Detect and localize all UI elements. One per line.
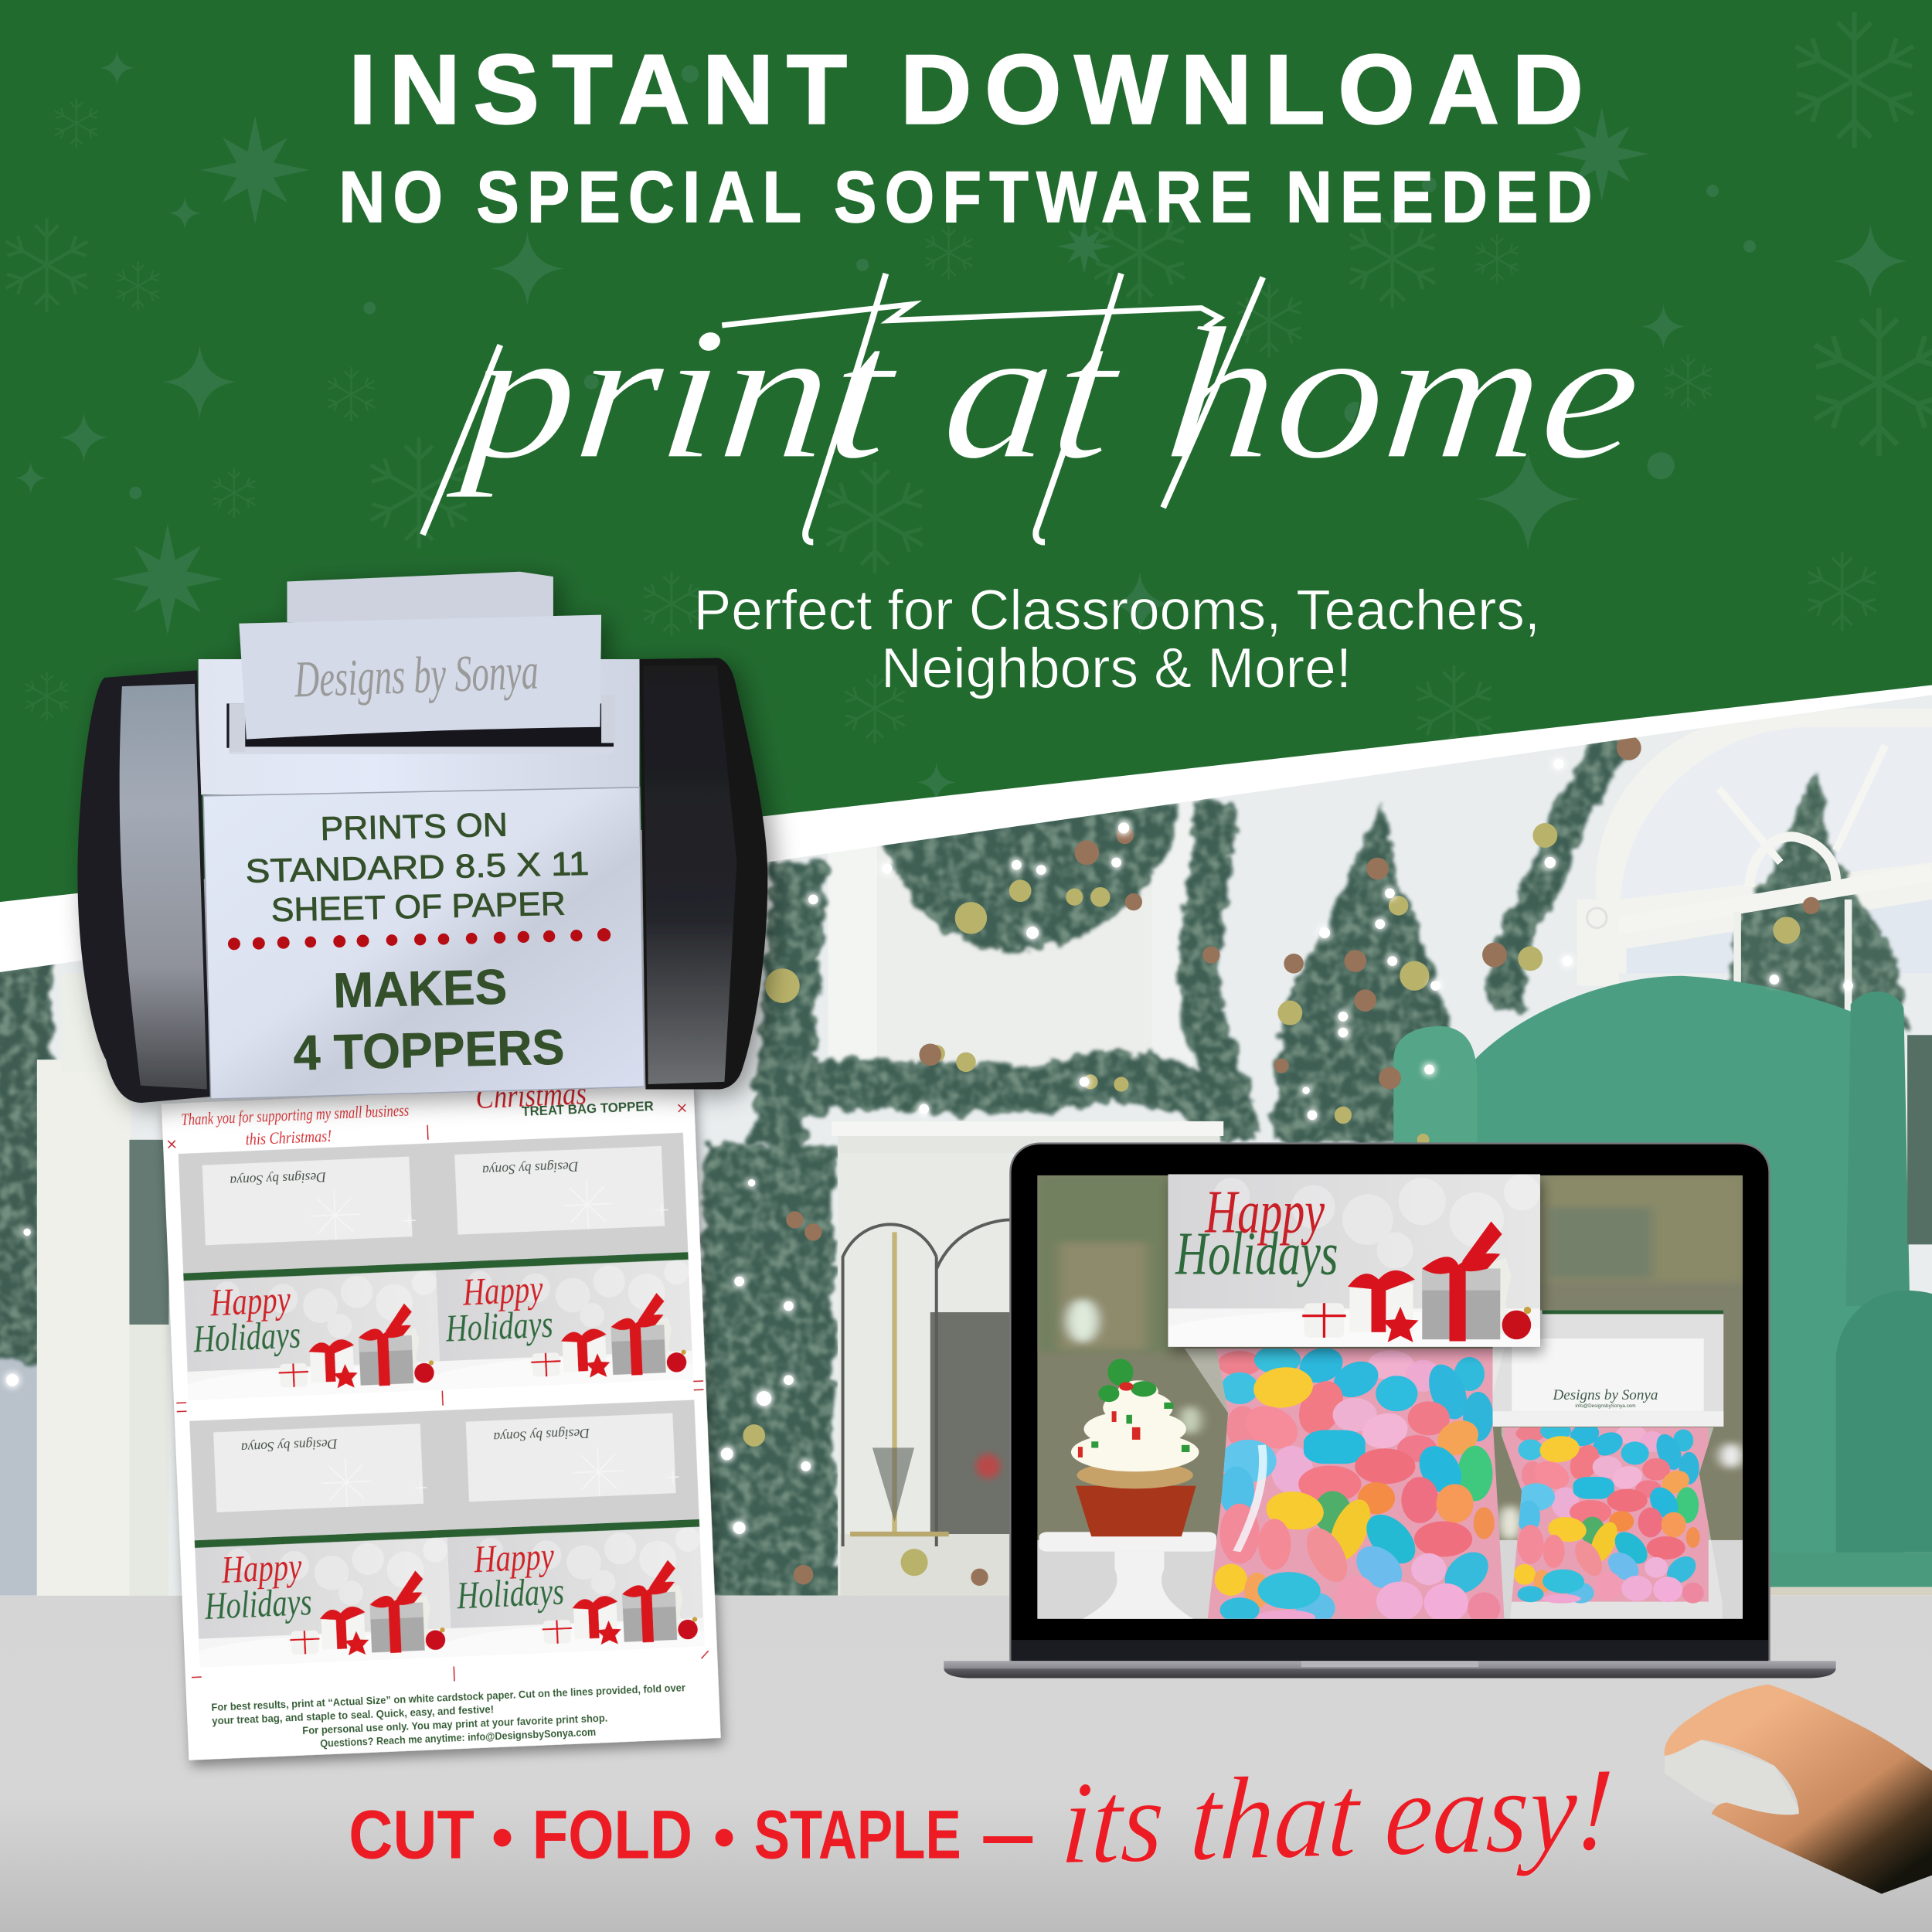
topper front row 1 right (405, 1258, 719, 1418)
sheet header text: Thank you for supporting my small business (181, 1100, 410, 1129)
topper front row 1 right: Happy (461, 1267, 544, 1313)
small card logo: info@DesignsbySonya.com (1575, 1403, 1636, 1409)
small topper card back (1493, 1310, 1723, 1427)
topper front row 1 right: Holidays (444, 1303, 554, 1349)
paper slot (226, 695, 615, 754)
paper coming out with logo (239, 615, 601, 740)
script title: print at home (423, 274, 1650, 543)
small card logo: Designs by Sonya (1552, 1387, 1658, 1403)
fireplace mantel and hearth (832, 1121, 1223, 1596)
printer (77, 572, 767, 1103)
left tree and column (0, 949, 168, 1596)
cut marks (165, 1104, 716, 1692)
printer panel text: MAKES (332, 958, 508, 1019)
subheadline: no special software needed: NO SPECIAL SOFTWARE NEEDED (338, 156, 1592, 237)
printing instructions: your treat bag, and staple to seal. Quick, easy, and festive! (212, 1703, 494, 1727)
snow stars pattern (15, 50, 1907, 802)
table surface floor (0, 1596, 1932, 1932)
topper back row 2 left: Designs by Sonya (240, 1437, 338, 1456)
red dotted divider (228, 928, 611, 950)
topper front row 2 right: Happy (472, 1535, 555, 1580)
cupcake (1071, 1359, 1199, 1536)
green background panel (0, 0, 1932, 986)
printer top housing (199, 659, 639, 794)
small treat bag (1502, 1421, 1723, 1619)
script title: print at home: print at home (444, 289, 1650, 498)
front panel (203, 787, 645, 1099)
sheet header text (180, 1072, 655, 1151)
headline: instant download: INSTANT DOWNLOAD (349, 35, 1583, 145)
green fold strip row 2 (195, 1519, 699, 1549)
laptop notch (1301, 1661, 1478, 1667)
laptop base (944, 1661, 1836, 1679)
armchair (1393, 976, 1932, 1597)
topper front row 2 left: Holidays (203, 1580, 313, 1628)
green fold strip row 1 (183, 1252, 689, 1281)
bottom slogan: cut fold staple: CUT (349, 1795, 474, 1872)
bottom slogan script: its that easy: its that easy! (1058, 1743, 1617, 1889)
big topper card front: Holidays (1175, 1220, 1338, 1288)
printer panel text: STANDARD 8.5 X 11 (245, 845, 590, 890)
sheet header text: this Christmas! (245, 1126, 332, 1148)
topper back row 2 right: Designs by Sonya (493, 1426, 590, 1445)
printed sheet of toppers (145, 1070, 733, 1761)
bottom slogan: cut fold staple: STAPLE (754, 1795, 961, 1872)
bottom slogan: cut fold staple: — (983, 1795, 1033, 1872)
ornaments (721, 736, 1853, 1586)
printing instructions: For personal use only. You may print at your favorite print shop. (302, 1713, 608, 1736)
topper back row 2 right (442, 1400, 699, 1530)
bottom slogan: cut fold staple: FOLD (532, 1795, 692, 1872)
bottom slogan: cut fold staple: • (713, 1802, 735, 1871)
tagline: Neighbors & More! (881, 637, 1352, 700)
computer mouse (1665, 1740, 1801, 1821)
topper back row 1 left (179, 1143, 436, 1274)
big topper card front: Happy (1205, 1178, 1325, 1246)
topper front row 2 left (164, 1536, 478, 1696)
rear paper (287, 572, 553, 622)
topper front row 1 left: Happy (209, 1278, 291, 1324)
right black grip (639, 658, 767, 1089)
printer panel text: SHEET OF PAPER (270, 886, 566, 929)
printing instructions: For best results, print at “Actual Size” on white cardstock paper. Cut on the lines provided, fold over (211, 1682, 685, 1713)
topper front row 1 left: Holidays (192, 1313, 301, 1360)
left black grip (77, 670, 211, 1103)
white diagonal band (0, 685, 1932, 986)
topper back row 2 left (189, 1410, 447, 1540)
topper front row 2 right (417, 1526, 730, 1685)
big topper card front (1165, 1174, 1551, 1362)
laptop body (1010, 1144, 1770, 1661)
sheet header text: TREAT BAG TOPPER (522, 1098, 654, 1119)
topper front row 2 right: Holidays (455, 1570, 565, 1617)
printing instructions (211, 1682, 687, 1754)
fireplace wall panel (828, 847, 877, 1060)
arched window (1577, 709, 1932, 1029)
topper front row 1 left (153, 1269, 467, 1428)
sheet header text: Christmas (474, 1075, 587, 1115)
hand on mouse (1665, 1685, 1932, 1894)
big treat bag (1185, 1345, 1507, 1624)
cake stand (1039, 1532, 1216, 1619)
bottom slogan: cut fold staple: • (492, 1802, 513, 1871)
topper back row 1 right: Designs by Sonya (481, 1158, 580, 1179)
printing instructions: Questions? Reach me anytime: info@DesignsbySonya.com (320, 1726, 597, 1750)
topper back row 1 right (430, 1133, 688, 1263)
bottom slogan: cut fold staple (349, 1795, 1033, 1872)
laptop (944, 1144, 1836, 1679)
tagline (694, 579, 1540, 700)
garland column and trees (727, 742, 1621, 1596)
tagline: Perfect for Classrooms, Teachers, (694, 579, 1540, 642)
paper coming out with logo: Designs by Sonya (293, 643, 539, 709)
printer panel text (244, 804, 594, 1082)
topper back row 1 left: Designs by Sonya (230, 1169, 327, 1189)
room photo background (0, 690, 1932, 1602)
printer panel text: PRINTS ON (320, 807, 508, 848)
topper front row 2 left: Happy (220, 1545, 303, 1591)
printer panel text: 4 TOPPERS (293, 1019, 565, 1080)
laptop screen scene (1037, 1175, 1743, 1624)
laptop chin (1012, 1640, 1768, 1661)
